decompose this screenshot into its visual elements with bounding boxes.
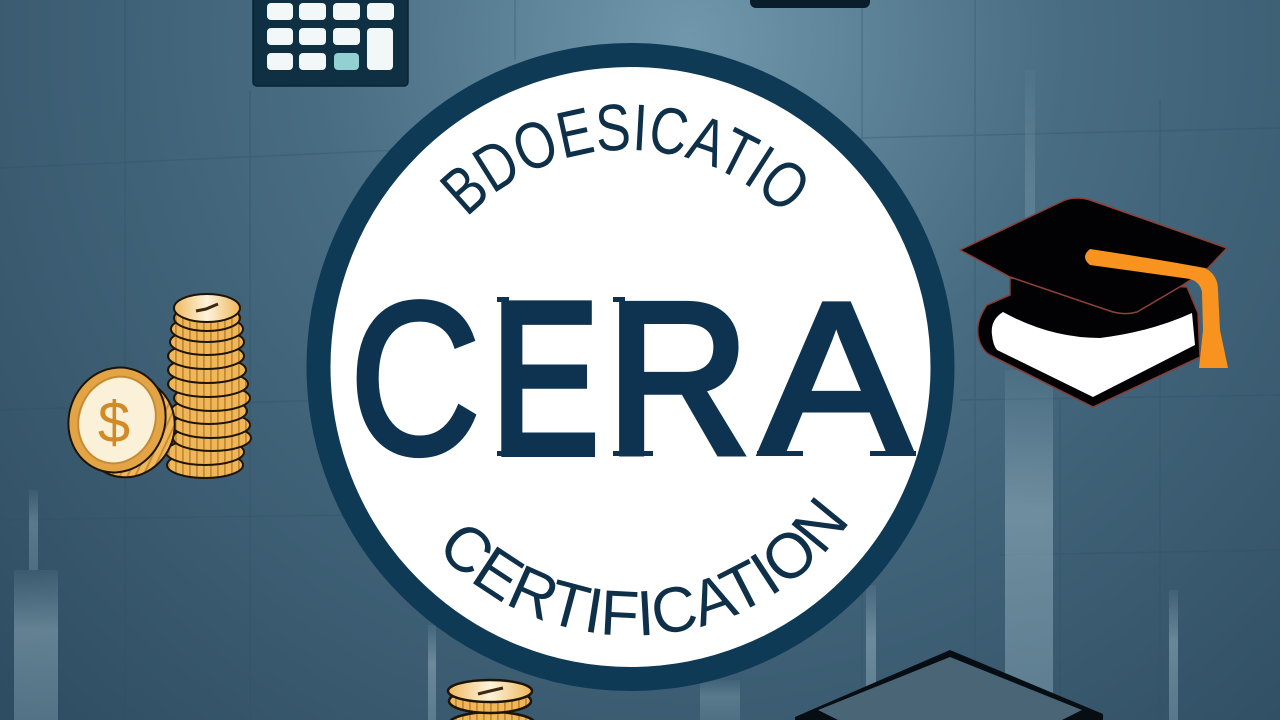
badge main text: A	[760, 257, 912, 499]
badge bottom text: CERTIFICATION	[445, 497, 848, 636]
icon: graduation cap on book	[960, 198, 1228, 407]
badge main text	[350, 257, 916, 499]
icon: coin stack with dollar coin	[54, 294, 251, 493]
badge top text: BDOESICATIO	[440, 104, 806, 215]
badge: CERA certification	[306, 43, 954, 691]
icon: calculator	[253, 0, 408, 86]
badge main text: E	[491, 257, 599, 499]
icon: small coin stack at bottom	[448, 680, 535, 720]
icon: laptop at bottom	[795, 650, 1103, 720]
badge main text: C	[350, 257, 480, 499]
badge main text: R	[606, 257, 750, 499]
icon: dark device at top	[750, 0, 870, 8]
dollar sign: $	[98, 390, 130, 455]
